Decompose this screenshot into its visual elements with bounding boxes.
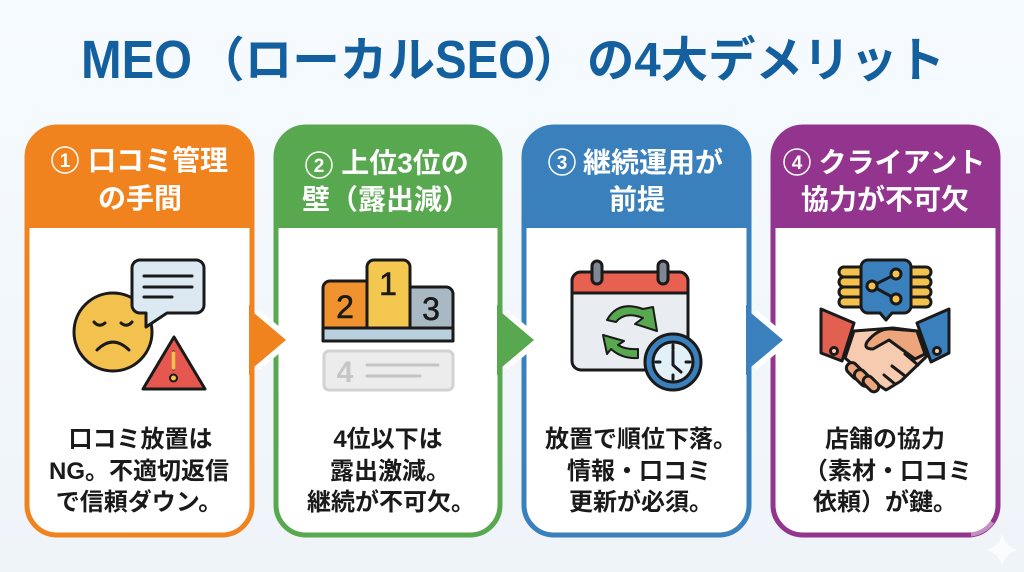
text: panel 1 xyxy=(49,426,229,516)
panel: 1 review management xyxy=(25,125,254,535)
icon: sad face, speech bubble and warning xyxy=(74,260,205,389)
arrow: 2 to 3 xyxy=(497,305,534,375)
text: panel 2: 4位以下は xyxy=(333,426,443,453)
text: panel 3: 放置で順位下落。 xyxy=(545,426,737,453)
heading: panel 4: クライアント xyxy=(819,147,985,178)
text: panel 3: 情報・口コミ xyxy=(567,458,711,485)
text: panel 3 xyxy=(545,426,737,516)
heading: panel 4: 4 xyxy=(792,153,803,174)
icon: podium xyxy=(323,260,453,390)
heading: panel 2: 上位3位の xyxy=(341,148,469,178)
heading: panel 1: 口コミ管理 xyxy=(88,145,228,176)
heading: panel 3: 前提 xyxy=(609,184,665,215)
heading: panel 3: 継続運用が xyxy=(583,146,723,178)
heading: panel 4 xyxy=(784,147,985,215)
text: panel 4: 依頼）が鍵。 xyxy=(813,488,957,516)
panel: 2 top three wall xyxy=(274,125,502,535)
heading: panel 1 xyxy=(52,145,228,214)
arrow: 3 to 4 xyxy=(746,305,783,375)
title: MEO xyxy=(81,30,192,90)
heading: panel 4: 協力が不可欠 xyxy=(801,183,969,215)
icon: calendar with cycle and clock xyxy=(572,261,701,390)
heading: panel 3 xyxy=(549,146,723,215)
panel: 3 continuous operation xyxy=(522,125,751,535)
heading: panel 2: 壁（露出減） xyxy=(302,184,470,215)
text: panel 3: 更新が必須。 xyxy=(569,488,713,516)
icon: podium: 3 xyxy=(422,291,440,327)
arrow: 1 to 2 xyxy=(249,305,286,375)
text: panel 2: 露出激減。 xyxy=(330,458,450,485)
icon: podium: 4 xyxy=(337,356,354,389)
heading: panel 1: の手間 xyxy=(98,183,182,214)
heading: panel 3: 3 xyxy=(557,153,567,174)
title: （ローカル xyxy=(197,34,435,88)
text: panel 1: 口コミ放置は xyxy=(68,426,212,453)
title: ） xyxy=(533,34,581,88)
icon: podium: 1 xyxy=(379,266,397,302)
text: panel 2 xyxy=(307,426,475,516)
icon: shared data and handshake xyxy=(821,260,949,394)
text: panel 2: 継続が不可欠。 xyxy=(307,488,475,516)
text: panel 1: NG。不適切返信 xyxy=(49,458,229,485)
heading: panel 2: 2 xyxy=(314,156,324,177)
icon: sparkle xyxy=(986,533,1018,567)
title: の4大デメリット xyxy=(587,34,945,88)
icon: podium: 2 xyxy=(336,289,354,325)
heading: panel 2 xyxy=(302,148,470,215)
text: panel 4: （素材・口コミ xyxy=(804,458,972,485)
panel: 4 client cooperation xyxy=(771,125,1000,535)
text: panel 4: 店舗の協力 xyxy=(825,426,945,453)
text: panel 4 xyxy=(804,426,972,516)
title: SEO xyxy=(435,30,535,90)
text: panel 1: で信頼ダウン。 xyxy=(56,488,222,516)
title xyxy=(81,30,945,90)
heading: panel 1: 1 xyxy=(60,151,71,172)
